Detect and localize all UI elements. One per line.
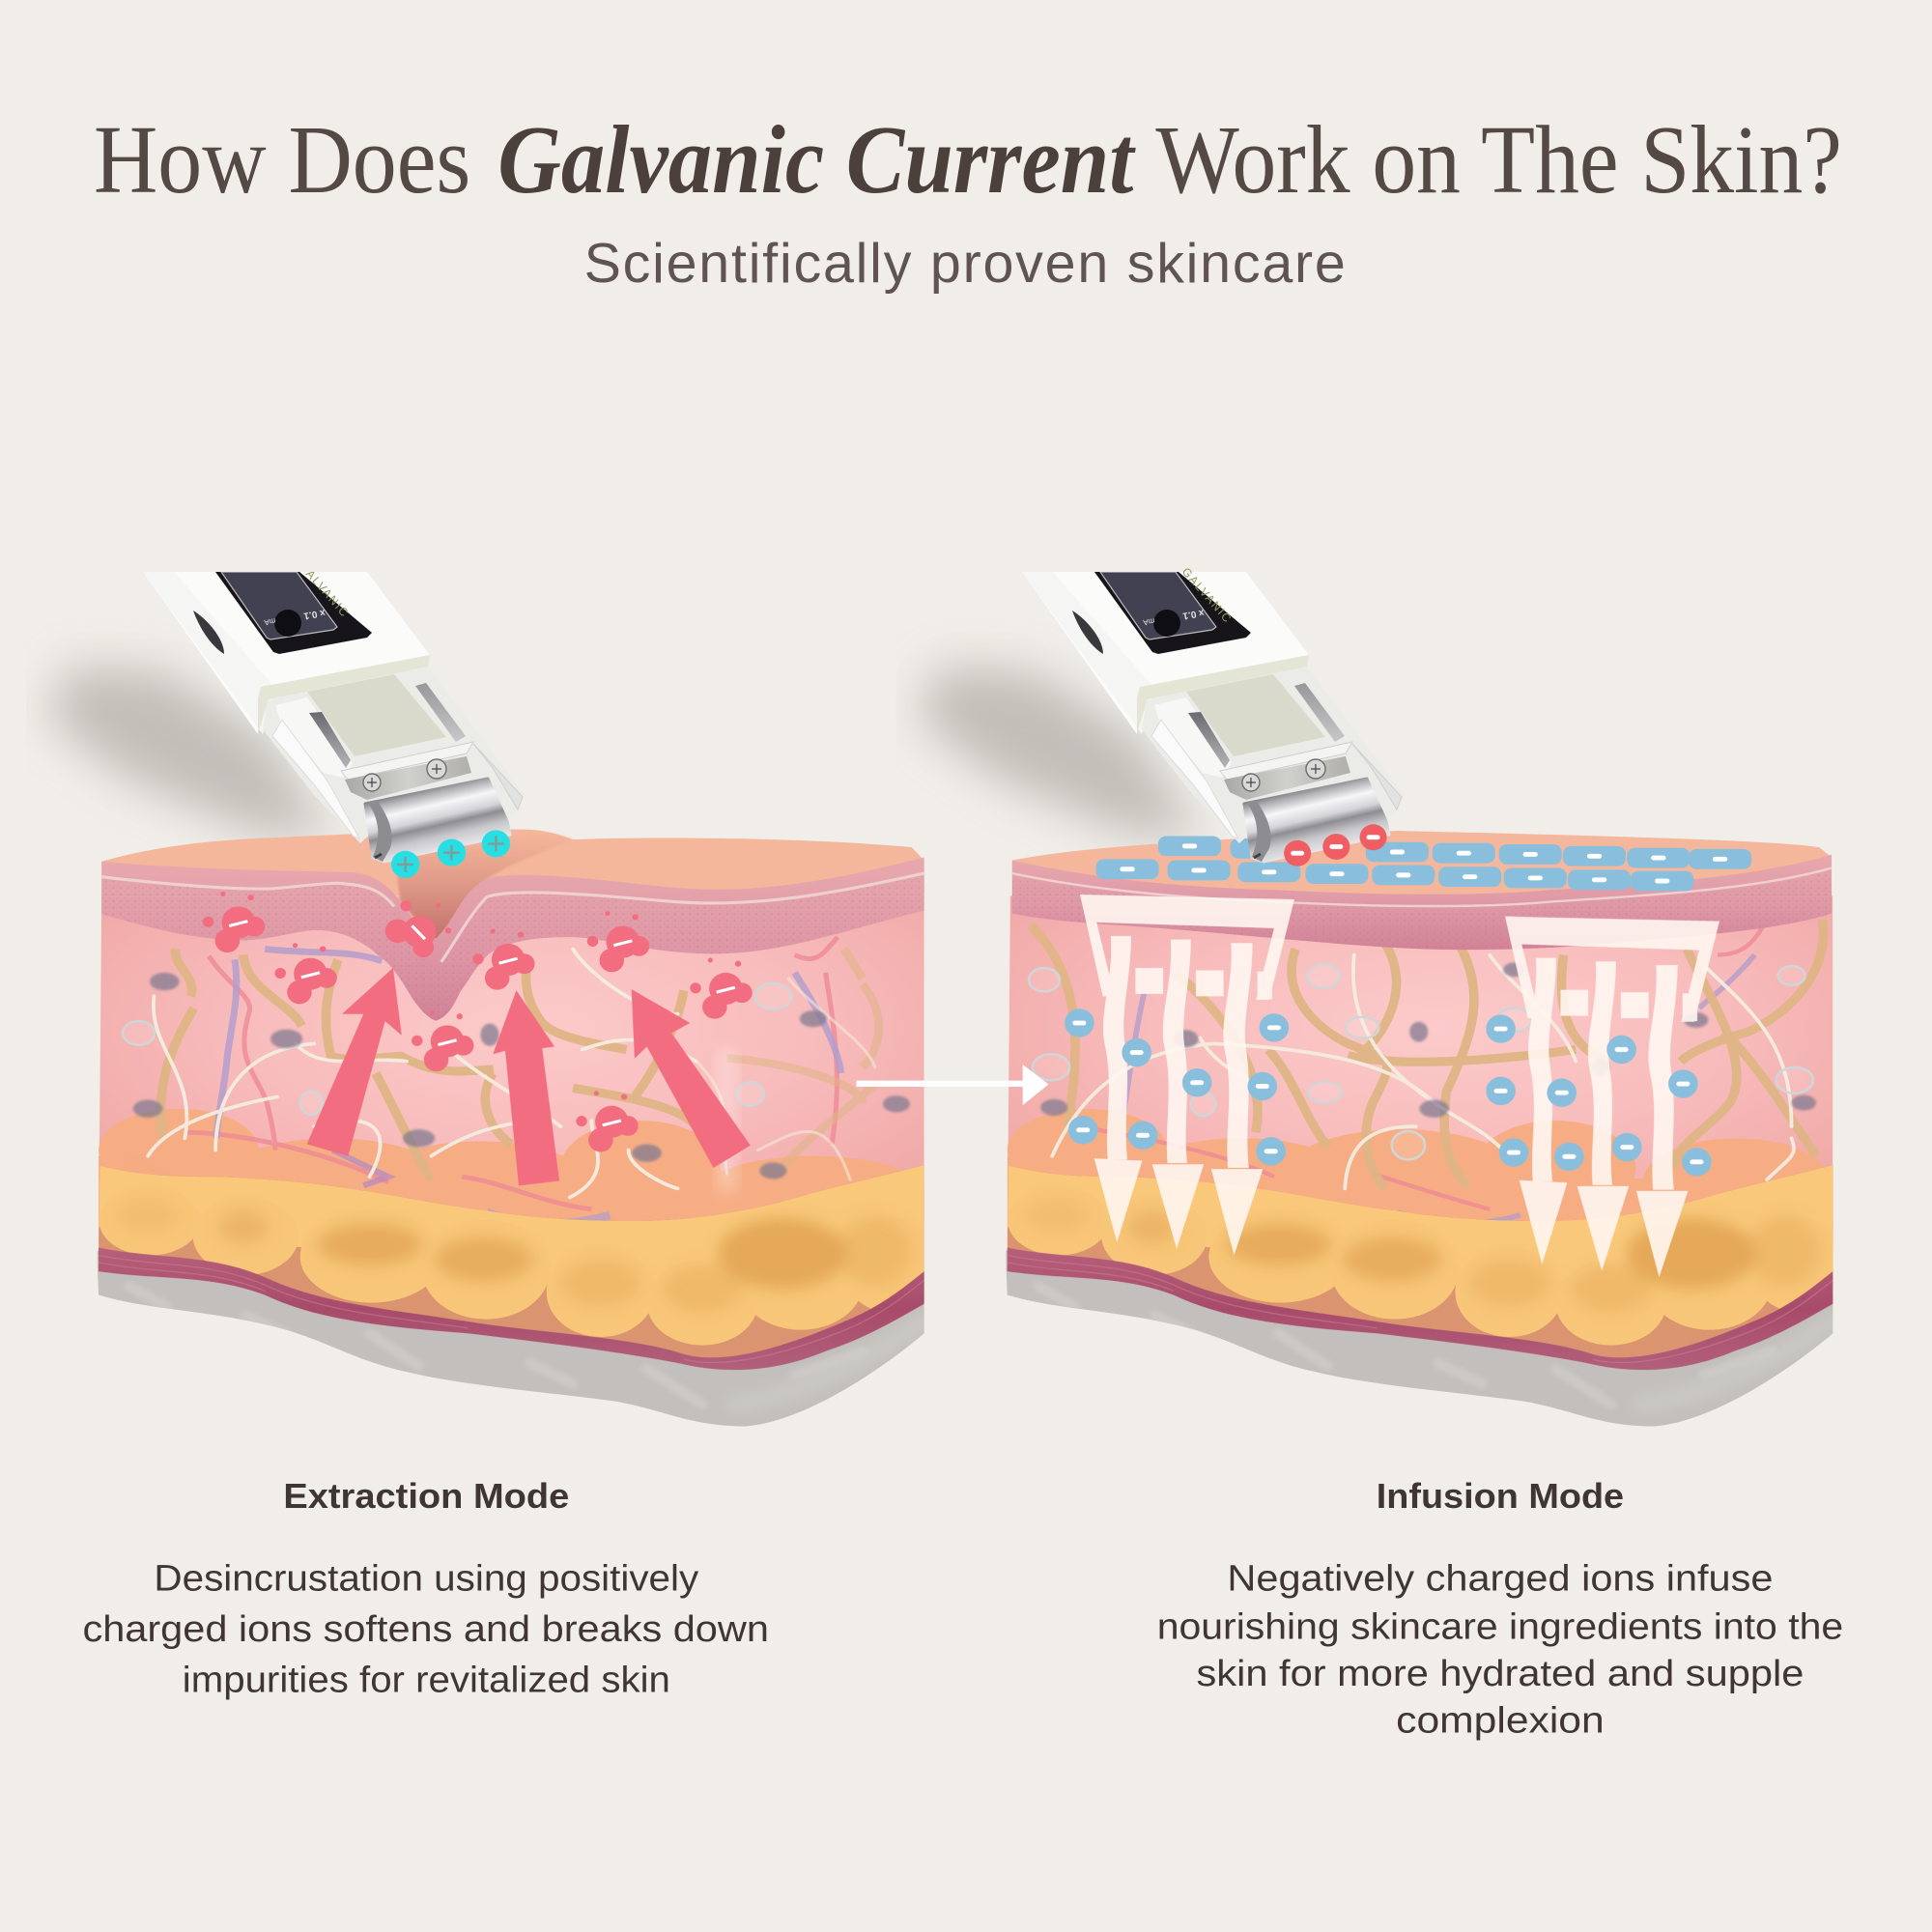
device: galvanic roller: GALVANIC [1179,565,1235,626]
negatively charged skincare capsules [1096,836,1751,891]
epidermis band [101,858,924,1020]
epidermis band [1012,854,1832,950]
negative ions in dermis [1065,1009,1712,1177]
skin block: extraction [98,830,938,1426]
title [94,105,1842,213]
device: galvanic roller: mA [1142,616,1155,627]
title: Work on The Skin? [1155,105,1842,213]
dermis fibres and vessels [1029,920,1824,1224]
device: galvanic roller [143,559,525,862]
negative ions at roller [1284,824,1387,867]
device: galvanic roller [1022,565,1404,862]
fat, muscle and base layers [98,1165,938,1426]
text block: infusion mode: Negatively charged ions infuse [1227,1558,1773,1599]
text block: infusion mode [1157,1477,1843,1740]
text block: extraction mode: Extraction Mode [283,1477,569,1516]
arrows: impurities drawn upward [307,968,751,1185]
text block: extraction mode: charged ions softens and breaks down [82,1608,769,1649]
dermis layer [1008,895,1833,1245]
device: galvanic roller: mA [263,616,276,627]
dent shading [394,832,573,943]
device shadow [919,667,1204,840]
title: Galvanic Current [497,105,1136,213]
device: galvanic roller: x 0.1 [1181,607,1205,621]
arrow: extraction to infusion [856,1065,1048,1105]
text block: infusion mode: skin for more hydrated and supple [1197,1653,1804,1693]
text block: extraction mode [82,1477,769,1699]
subtitle: Scientifically proven skincare [584,233,1346,295]
device: galvanic roller: x 0.1 [302,607,326,621]
text block: extraction mode: impurities for revitalized skin [183,1659,670,1699]
text block: extraction mode: Desincrustation using positively [154,1558,698,1599]
skin surface [1012,831,1832,895]
device label: GALVANIC [297,559,352,620]
text block: infusion mode: Infusion Mode [1377,1477,1624,1516]
dermis fibres and vessels [123,937,910,1224]
device shadow [48,667,333,840]
title: How Does [94,105,470,213]
skin surface with dent [101,830,924,895]
arrows: infusion downward, group 1 [1080,895,1294,1256]
text block: infusion mode: complexion [1396,1699,1605,1740]
impurity clusters with negative charge [203,887,753,1151]
fat, muscle and base layers [1006,1165,1847,1426]
panel: extraction mode illustration [48,559,938,1426]
skin block: infusion [1006,831,1847,1426]
positive ions [391,830,510,878]
arrows: infusion downward, group 2 [1505,917,1719,1277]
panel: infusion mode illustration [919,565,1847,1426]
dermis layer [99,895,924,1245]
text block: infusion mode: nourishing skincare ingredients into the [1157,1605,1843,1646]
